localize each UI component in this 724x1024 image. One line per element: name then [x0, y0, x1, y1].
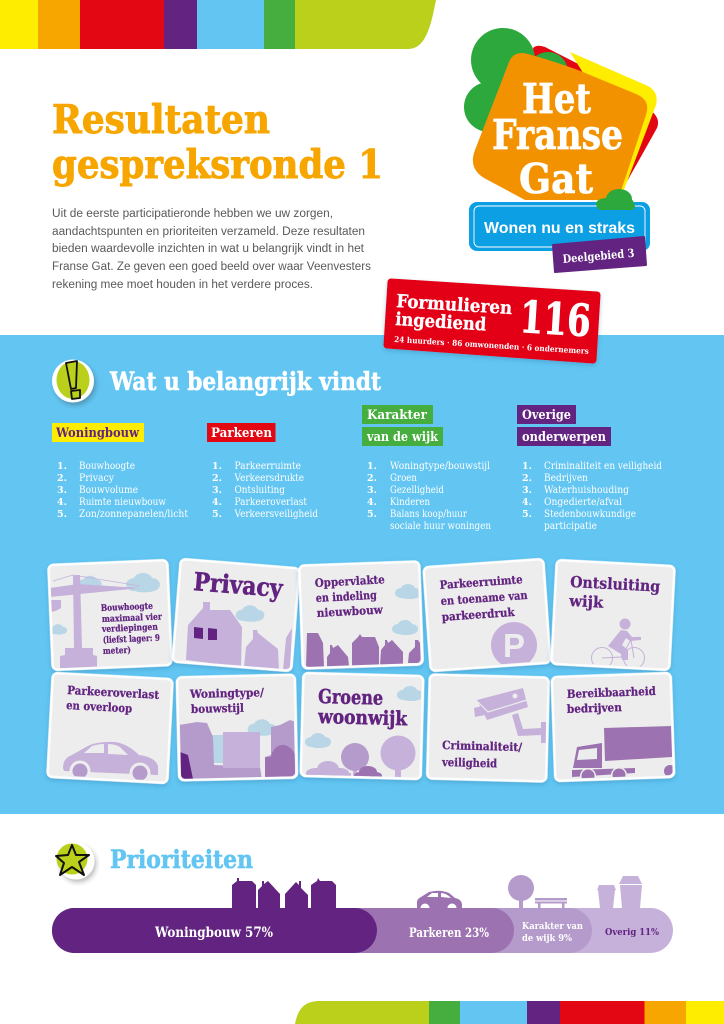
list: karakter van de wijk: 2.	[367, 473, 377, 484]
logo: Het Franse Gat: Franse	[492, 111, 623, 159]
icon: car	[63, 742, 158, 784]
list: karakter van de wijk	[367, 460, 491, 532]
card: bereikbaarheid bedrijven	[552, 673, 676, 784]
chart: priorities bar: Overig 11%	[605, 927, 659, 938]
list: parkeren: 3.	[212, 485, 222, 496]
intro text: Franse Gat. Ze geven een goed beeld over waar Veenvesters	[52, 261, 371, 273]
chart: priorities bar: Parkeren 23%	[409, 926, 489, 941]
icon: houses silhouette	[232, 878, 336, 908]
card: bereikbaarheid bedrijven: Bereikbaarheid	[567, 684, 656, 701]
list: karakter van de wijk: Gezelligheid	[390, 484, 444, 496]
list: parkeren	[212, 460, 318, 520]
list: woningbouw	[57, 460, 189, 520]
card: bouwhoogte: (liefst lager: 9	[103, 633, 160, 646]
list: woningbouw: 2.	[57, 473, 67, 484]
list: karakter van de wijk: sociale huur woningen	[390, 520, 491, 532]
list: parkeren: 1.	[212, 461, 222, 472]
icon: crane	[49, 573, 160, 668]
card: bouwhoogte	[48, 560, 172, 670]
list: karakter van de wijk: 3.	[367, 485, 377, 496]
list: karakter van de wijk: 1.	[367, 461, 377, 472]
card: parkeerruimte: parkeerdruk	[441, 605, 516, 624]
icon: security camera	[474, 688, 546, 743]
card: groene woonwijk: Groene	[318, 685, 383, 710]
card: bouwhoogte: verdiepingen	[101, 623, 158, 635]
icon: cyclist	[592, 618, 644, 668]
list: overige onderwerpen: 5.	[522, 509, 532, 520]
title: gespreksronde 1	[52, 142, 383, 188]
list: karakter van de wijk: Woningtype/bouwstijl	[390, 460, 491, 472]
card: oppervlakte en indeling nieuwbouw	[299, 561, 423, 669]
intro text	[52, 208, 371, 291]
list: woningbouw: 1.	[57, 461, 67, 472]
card: privacy: Privacy	[193, 567, 285, 603]
callout: formulieren ingediend: ingediend	[395, 309, 487, 336]
list: parkeren: Parkeerruimte	[234, 460, 301, 472]
card: ontsluiting wijk	[551, 560, 675, 670]
chart: priorities bar: Woningbouw 57%	[154, 925, 273, 941]
list: overige onderwerpen: Ongedierte/afval	[544, 496, 623, 508]
list: woningbouw: 3.	[57, 485, 67, 496]
card: woningtype/bouwstijl: bouwstijl	[191, 701, 245, 716]
list: overige onderwerpen: 1.	[522, 461, 532, 472]
panel: wat u belangrijk vindt (blue background)	[0, 335, 724, 814]
list: parkeren: Verkeersdrukte	[234, 472, 304, 484]
list: parkeren: Verkeersveiligheid	[234, 508, 318, 520]
list: woningbouw: Zon/zonnepanelen/licht	[79, 508, 189, 520]
label: overige onderwerpen	[517, 405, 611, 446]
logo: Het Franse Gat: Wonen nu en straks	[484, 220, 635, 237]
card: bereikbaarheid bedrijven: bedrijven	[567, 700, 623, 716]
card: criminaliteit/veiligheid: Criminaliteit/	[442, 738, 523, 754]
card: bouwhoogte: meter)	[103, 645, 131, 657]
callout: formulieren ingediend: Formulieren	[396, 291, 513, 319]
card: parkeerruimte: en toename van	[440, 588, 529, 608]
card: parkeerruimte	[424, 559, 550, 671]
card: bouwhoogte: Bouwhoogte	[101, 602, 153, 614]
list: woningbouw: Ruimte nieuwbouw	[79, 496, 166, 508]
list: overige onderwerpen	[522, 460, 662, 532]
list: overige onderwerpen: 4.	[522, 497, 532, 508]
icon: row of houses	[306, 584, 423, 667]
label: woningbouw: Woningbouw	[55, 426, 140, 441]
card: criminaliteit/veiligheid: veiligheid	[441, 755, 497, 770]
card: ontsluiting wijk: Ontsluiting	[570, 572, 661, 596]
card: bouwhoogte: maximaal vier	[102, 612, 162, 625]
list: parkeren: 5.	[212, 509, 222, 520]
icon: parking sign: P	[503, 627, 525, 664]
intro text: rekening mee moet houden in het verdere proces.	[52, 279, 313, 291]
logo: Het Franse Gat: Gat	[519, 155, 593, 203]
list: overige onderwerpen: Waterhuishouding	[544, 484, 629, 496]
card: parkeeroverlast: Parkeeroverlast	[67, 683, 160, 702]
intro text: bieden waardevolle inzichten in wat u belangrijk vindt in het	[52, 243, 365, 255]
label: overige onderwerpen: Overige	[522, 408, 571, 423]
list: parkeren: 2.	[212, 473, 222, 484]
list: overige onderwerpen: 3.	[522, 485, 532, 496]
card: oppervlakte en indeling nieuwbouw: Oppervlakte	[314, 572, 385, 590]
icon: star	[56, 842, 94, 880]
card: parkeerruimte: Parkeerruimte	[439, 572, 523, 592]
list: woningbouw: 5.	[57, 509, 67, 520]
title: Resultaten	[52, 97, 270, 143]
callout: formulieren ingediend: 24 huurders · 86 omwonenden · 6 ondernemers	[394, 334, 590, 356]
card: woningtype/bouwstijl: Woningtype/	[189, 685, 265, 701]
list: karakter van de wijk: Kinderen	[390, 496, 430, 508]
list: parkeren: Parkeeroverlast	[234, 496, 308, 508]
card: groene woonwijk: woonwijk	[317, 705, 408, 730]
list: woningbouw: 4.	[57, 497, 67, 508]
card: parkeeroverlast	[47, 673, 173, 784]
logo: Het Franse Gat: Het	[522, 75, 591, 123]
list: parkeren: 4.	[212, 497, 222, 508]
card: parkeeroverlast: en overloop	[66, 698, 132, 715]
label: karakter van de wijk	[362, 405, 443, 446]
list: overige onderwerpen: Criminaliteit en veiligheid	[544, 460, 662, 472]
list: karakter van de wijk: 4.	[367, 497, 377, 508]
card: criminaliteit/veiligheid	[427, 674, 549, 782]
icon: exclamation mark	[52, 360, 94, 402]
list: overige onderwerpen: Bedrijven	[544, 472, 588, 484]
callout: formulieren ingediend: 116	[518, 292, 592, 347]
card: groene woonwijk	[301, 673, 423, 780]
chart: priorities bar: de wijk 9%	[522, 933, 572, 944]
list: woningbouw: Bouwvolume	[79, 484, 138, 496]
icon: trees	[305, 686, 423, 780]
list: woningbouw: Privacy	[79, 472, 114, 484]
heading: prioriteiten: Prioriteiten	[110, 845, 253, 874]
title	[52, 97, 383, 188]
intro text: aandachtspunten en prioriteiten verzameld. Deze resultaten	[52, 226, 365, 238]
card: ontsluiting wijk: wijk	[568, 591, 604, 612]
logo: Het Franse Gat: Deelgebied 3	[562, 246, 635, 266]
logo: Het Franse Gat	[464, 28, 658, 272]
label: overige onderwerpen: onderwerpen	[522, 430, 606, 445]
icon: car silhouette	[417, 891, 462, 912]
bottom colour bar	[295, 1001, 724, 1024]
list: overige onderwerpen: Stedenbouwkundige	[544, 508, 636, 520]
label: karakter van de wijk: Karakter	[367, 408, 427, 423]
chart: priorities bar: Karakter van	[522, 921, 583, 932]
card: oppervlakte en indeling nieuwbouw: nieuwbouw	[316, 603, 384, 620]
list: overige onderwerpen: participatie	[544, 520, 597, 532]
list: overige onderwerpen: 2.	[522, 473, 532, 484]
list: parkeren: Ontsluiting	[234, 484, 285, 496]
label: parkeren: Parkeren	[211, 426, 272, 441]
icon: buildings	[179, 719, 296, 780]
list: woningbouw: Bouwhoogte	[79, 460, 135, 472]
callout: formulieren ingediend	[387, 282, 597, 360]
list: karakter van de wijk: Groen	[390, 472, 417, 484]
top colour bar	[0, 0, 436, 49]
chart: priorities bar	[52, 908, 673, 953]
list: karakter van de wijk: 5.	[367, 509, 377, 520]
label: karakter van de wijk: van de wijk	[366, 430, 439, 445]
card: privacy	[173, 559, 299, 671]
icon: houses	[186, 602, 292, 670]
card: woningtype/bouwstijl	[177, 675, 297, 780]
heading: wat u belangrijk vindt: Wat u belangrijk vindt	[109, 367, 381, 396]
intro text: Uit de eerste participatieronde hebben we uw zorgen,	[52, 208, 333, 220]
card: oppervlakte en indeling nieuwbouw: en indeling	[315, 588, 377, 605]
list: karakter van de wijk: Balans koop/huur	[390, 508, 468, 520]
icon: truck	[572, 726, 673, 778]
icon: tree and bench	[508, 875, 567, 908]
icon: waste bins	[597, 876, 642, 908]
